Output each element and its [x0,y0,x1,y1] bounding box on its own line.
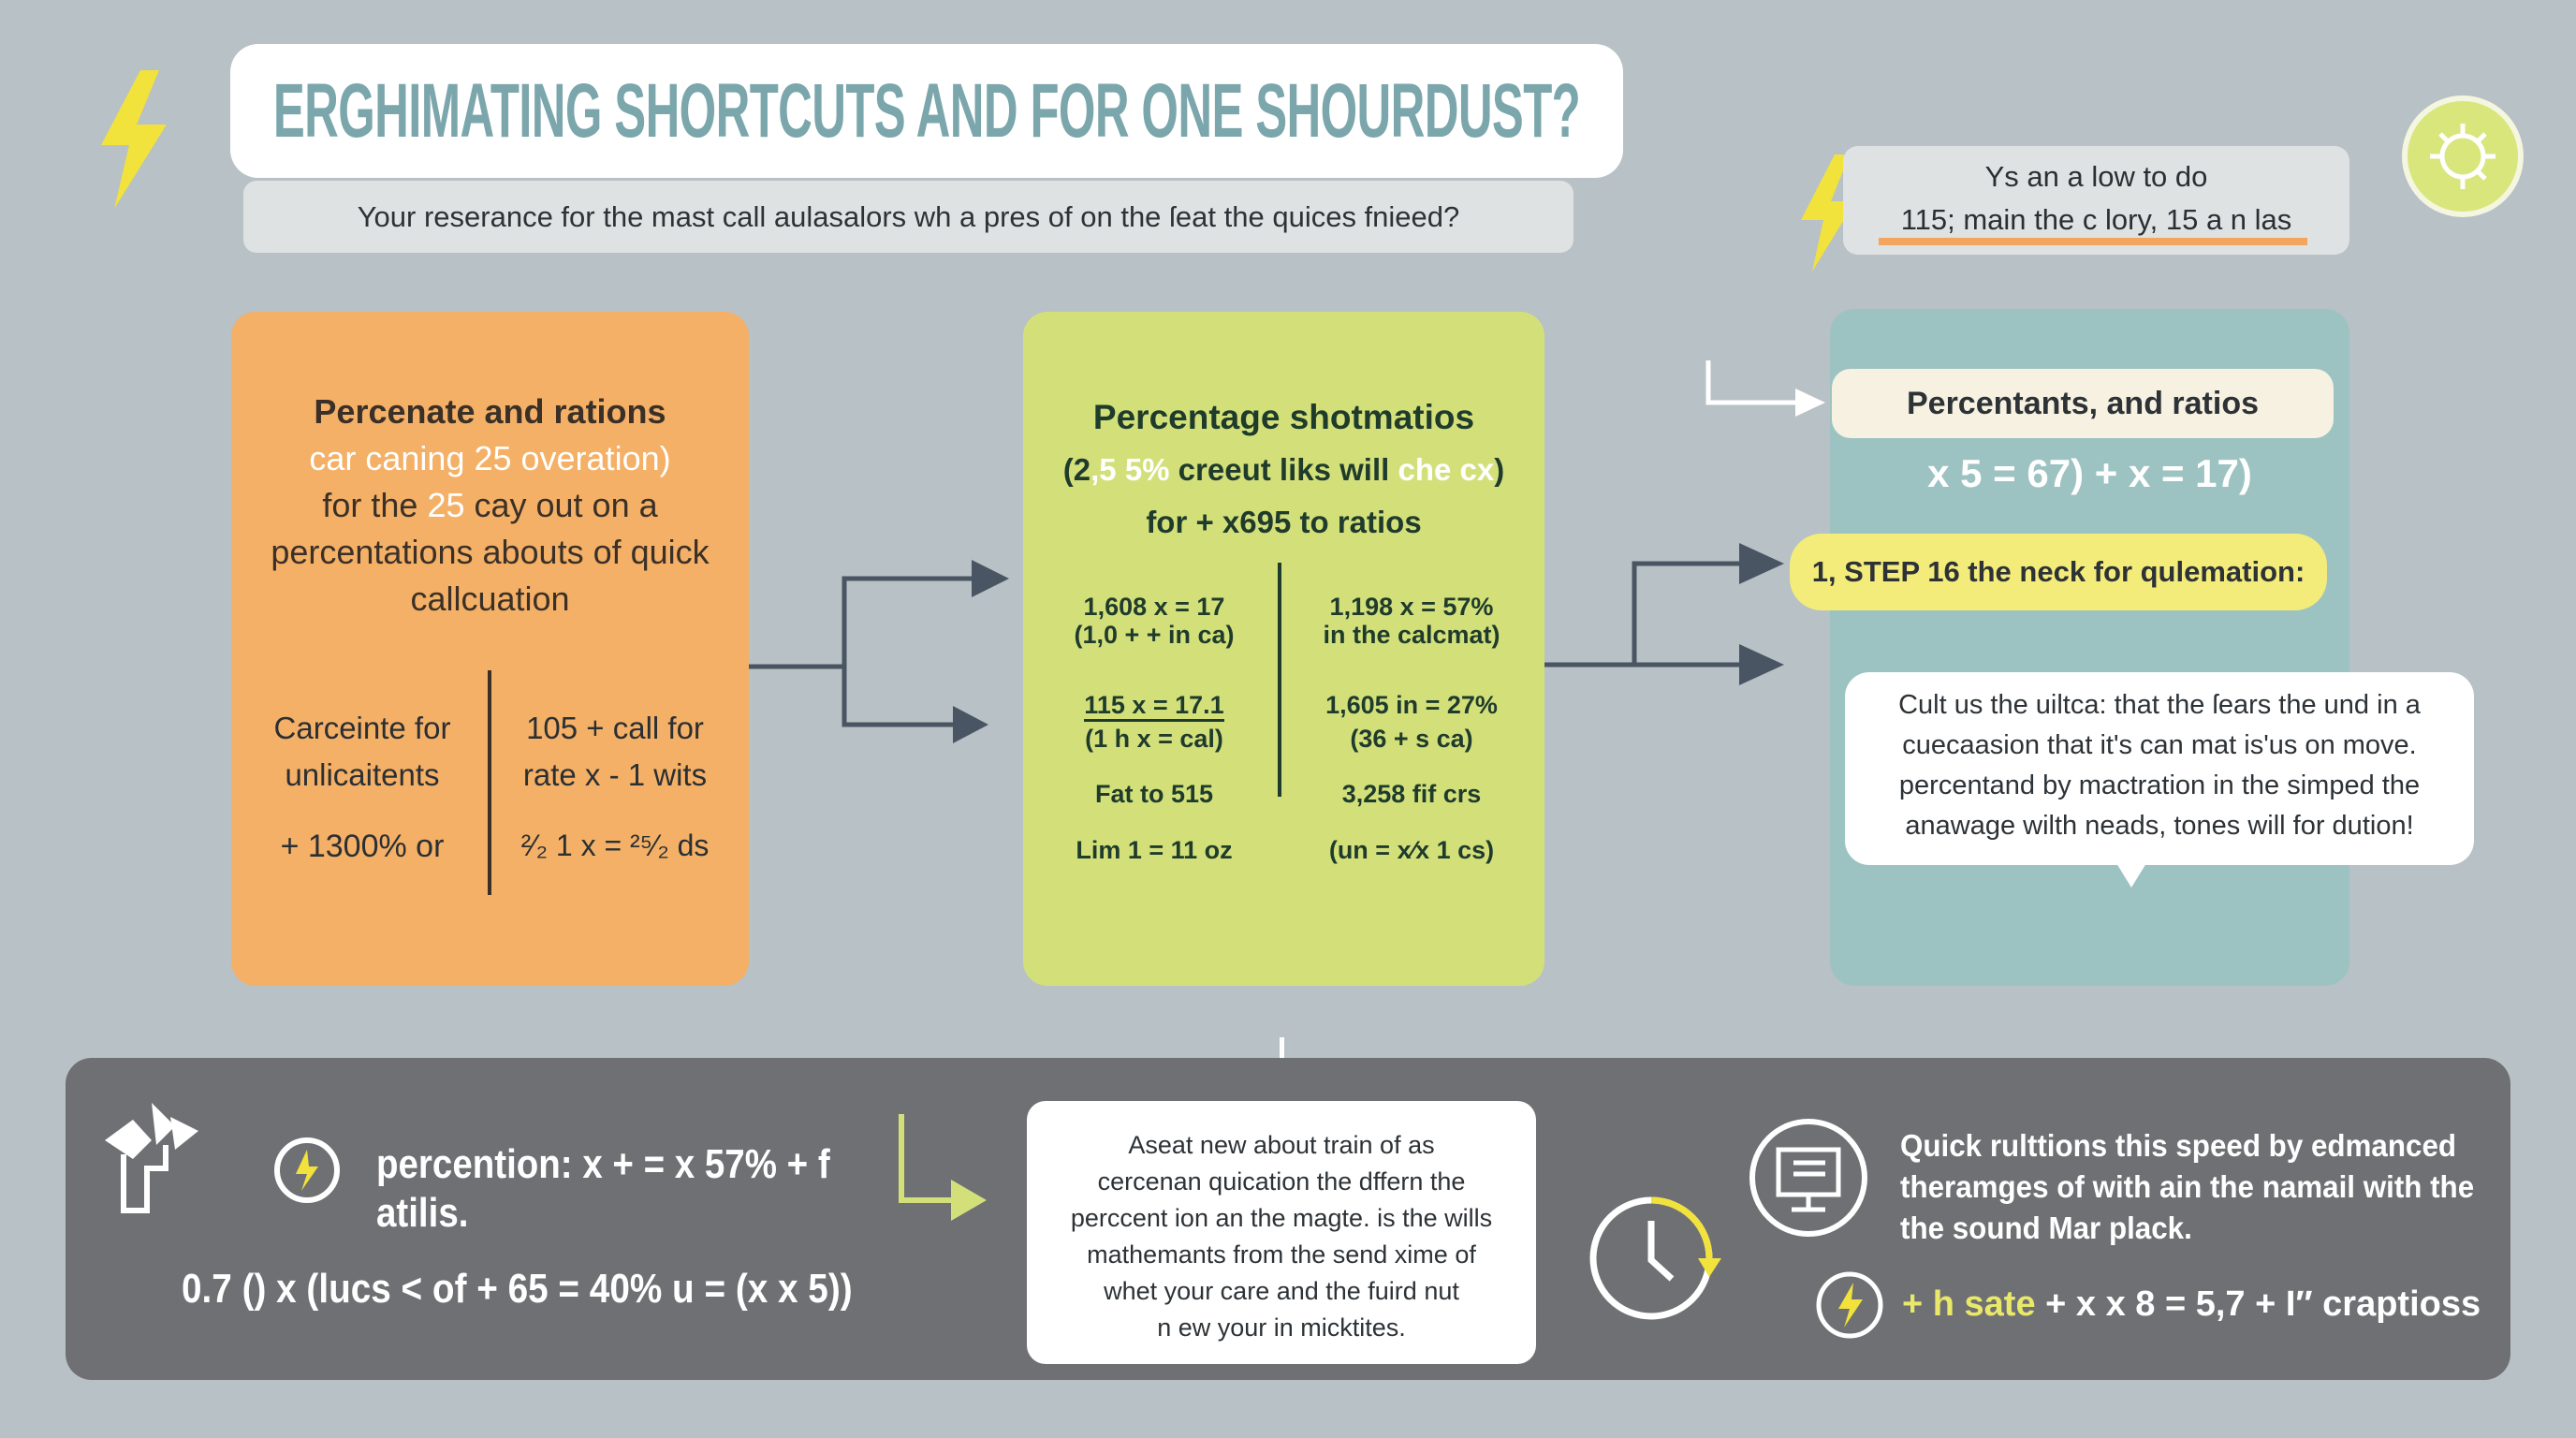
bottom left text: atilis. [376,1190,468,1236]
bottom center white box [1027,1101,1536,1364]
arrow: green elbow [899,1114,987,1221]
callout bubble: Cult us the uiltca: that the ſears the und in a [1898,690,2421,720]
title box [230,44,1623,178]
teal formula: x 5 = 67) + x = 17) [1927,451,2252,495]
green heading: for + x695 to ratios [1146,505,1422,539]
note top right [1843,146,2349,255]
panel: green shortcuts: (36 + s ca) [1350,725,1473,753]
panel: green shortcuts: (un = x⁄x 1 cs) [1329,836,1494,864]
callout bubble: percentand by mactration in the simped the [1899,770,2420,800]
subtitle bar: Your reserance for the mast call aulasalors wh a pres of on the ſeat the quices fnieed? [358,200,1459,233]
orange heading: percentations abouts of quick [271,533,710,571]
bottom right text: Quick rulttions this speed by edmanced [1900,1128,2456,1163]
green table [1278,563,1281,797]
panel: orange percentages: 105 + call for [526,711,704,745]
panel: orange percentages: rate x - 1 wits [523,757,707,792]
panel: orange percentages: Carceinte for [274,711,450,745]
bottom center white box: whet your care and the fuird nut [1104,1277,1459,1305]
bottom right text: the sound Mar plack. [1900,1211,2192,1245]
panel: green shortcuts: in the calcmat) [1323,621,1500,649]
icon: monitor [1749,1119,1867,1237]
bottom center white box: cercenan quication the dffern the [1098,1167,1465,1196]
yellow step pill: 1, STEP 16 the neck for qulemation: [1812,555,2305,588]
icon: lightning left [101,70,167,209]
bottom left text [376,1141,830,1236]
green heading [1063,398,1504,539]
orange heading: callcuation [410,580,570,618]
bottom right text: theramges of with ain the namail with the [1900,1169,2474,1204]
panel: green shortcuts: 115 x = 17.1 [1084,691,1224,719]
arrows: green to teal [1544,543,1784,685]
green heading: Percentage shotmatios [1093,398,1474,436]
panel: orange percentages: + 1300% or [281,829,444,864]
panel: green shortcuts: Lim 1 = 11 oz [1076,836,1233,864]
subtitle bar [243,181,1573,253]
panel: green shortcuts: 1,608 x = 17 [1084,593,1224,621]
orange columns [488,670,491,895]
bottom left text: percention: x + = x 57% + f [376,1141,830,1187]
note top right: Ys an a low to do [1985,160,2207,193]
panel: green shortcuts [1023,312,1544,986]
orange heading: car caning 25 overation) [309,439,671,477]
panel: teal ratios [1830,309,2349,986]
bottom center white box: n ew your in micktites. [1157,1313,1406,1342]
icon: circle gear [2402,95,2524,217]
panel: green shortcuts: 1,605 in = 27% [1325,691,1498,719]
yellow step pill [1790,534,2327,610]
bottom center white box: mathemants from the send xime of [1087,1240,1476,1269]
connector line to bottom [1280,1037,1284,1103]
teal label [1832,369,2334,438]
title box: ERGHIMATING SHORTCUTS AND FOR ONE SHOURDUST? [273,68,1580,154]
bottom center white box: perccent ion an the magte. is the wills [1071,1204,1492,1232]
callout bubble: cuecaasion that it's can mat is'us on move. [1902,730,2417,760]
orange heading: for the 25 cay out on a [322,486,658,524]
note top right: 115; main the c lory, 15 a n las [1901,203,2291,236]
arrow: into teal label [1705,360,1825,417]
icon: clock [1589,1196,1721,1320]
green heading: (2,5 5% creeut liks will che cx) [1063,452,1504,487]
teal label: Percentants, and ratios [1907,386,2259,421]
panel: bottom dark bar [66,1058,2510,1380]
orange heading [271,392,710,618]
panel: orange percentages: ²⁄₂ 1 x = ²⁵⁄₂ ds [521,829,709,862]
icon: refresh lightning [274,1137,340,1203]
bottom center white box: Aseat new about train of as [1128,1131,1435,1159]
panel: green shortcuts: 3,258 fif crs [1342,780,1481,808]
icon: lightning top-right [1801,154,1845,271]
orange heading: Percenate and rations [314,392,666,431]
panel: green shortcuts: (1,0 + + in ca) [1074,621,1235,649]
panel: green shortcuts: 1,198 x = 57% [1330,593,1493,621]
panel: green shortcuts: Fat to 515 [1095,780,1213,808]
callout bubble [1845,672,2474,865]
callout bubble: anawage wilth neads, tones will for dution! [1905,811,2414,841]
panel: green shortcuts: (1 h x = cal) [1085,725,1223,753]
panel: orange percentages [231,312,749,986]
panel: orange percentages: unlicaitents [285,757,440,792]
bottom right text [1900,1128,2474,1245]
arrows: orange to green [749,560,1009,743]
icon: lightning circle [1816,1271,1883,1339]
panel: bottom dark bar: 0.7 () x (lucs < of + 65 = 40% u = (x x 5)) [182,1266,853,1312]
bottom right formula: + h sate + x x 8 = 5,7 + I″ craptioss [1902,1284,2481,1324]
icon: flags [105,1103,198,1213]
